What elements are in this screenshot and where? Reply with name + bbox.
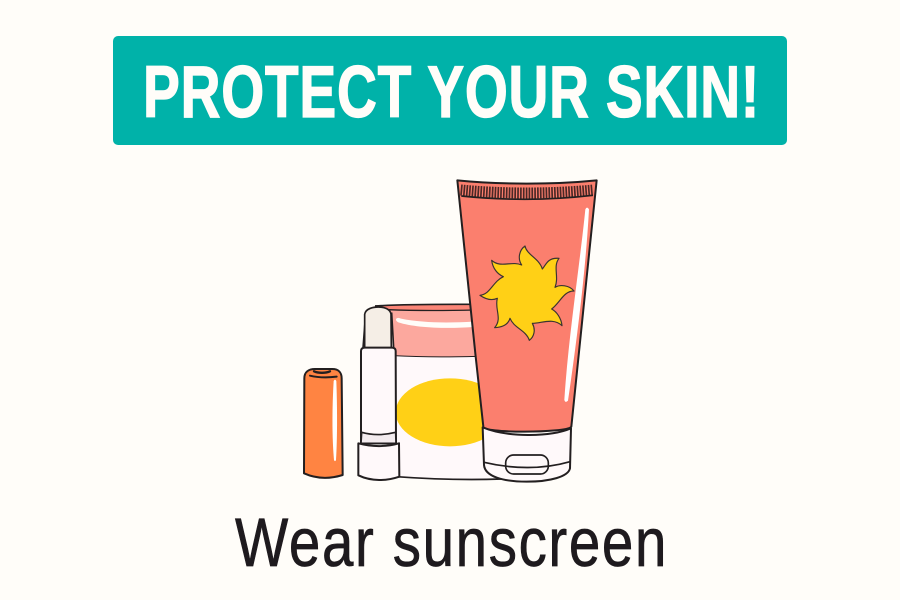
- ribbed band: [461, 190, 594, 193]
- yellow label: [396, 378, 504, 446]
- icon: cream jar: [367, 304, 504, 480]
- icon: orange lip balm cap: [304, 369, 343, 478]
- caption: Wear sunscreen: [235, 504, 668, 581]
- title banner: [113, 36, 787, 145]
- icon: lip balm stick: [358, 307, 399, 480]
- highlight: [564, 208, 589, 402]
- sun logo: [480, 246, 574, 340]
- tube body: [457, 180, 597, 432]
- icon: sunscreen tube: [457, 180, 597, 432]
- illustration: sunscreen products: [304, 180, 597, 482]
- icon: tube cap: [483, 427, 571, 482]
